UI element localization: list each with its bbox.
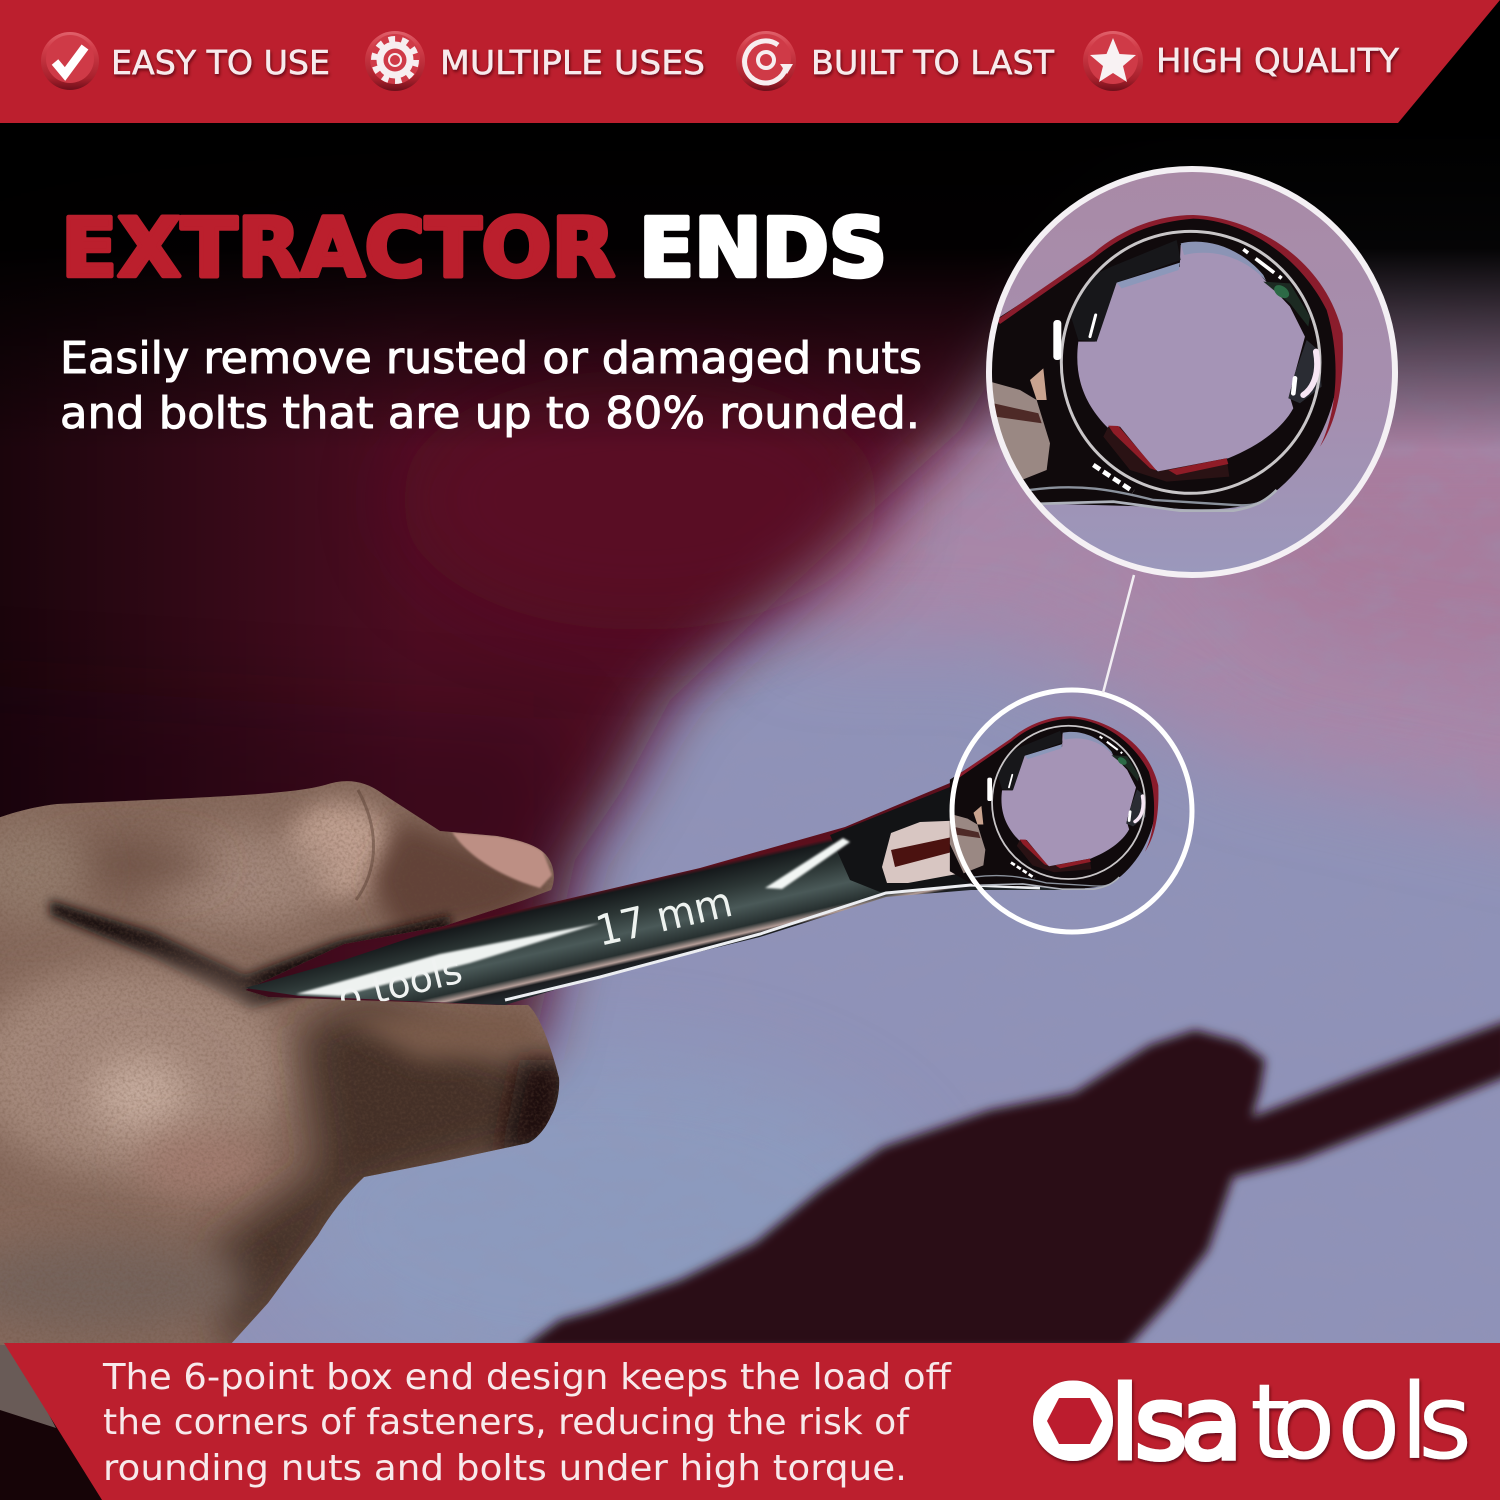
logo: O [1033, 1361, 1113, 1483]
body text: and bolts that are up to 80% rounded. [60, 388, 920, 439]
body text [60, 333, 922, 439]
thumbnail [452, 832, 552, 888]
label: multiple uses: MULTIPLE USES [440, 43, 705, 82]
icon: star [1083, 31, 1143, 91]
magnified wrench body [990, 215, 1343, 511]
wrench neck [830, 725, 1060, 892]
label: built to last: BUILT TO LAST [811, 43, 1055, 82]
top banner [0, 0, 1500, 125]
logo: lsa [1111, 1365, 1242, 1482]
icon: cycle [736, 31, 796, 91]
magnifier ring [989, 169, 1395, 575]
connector line [1103, 575, 1134, 693]
bottom description: the corners of fasteners, reducing the risk of [103, 1402, 910, 1443]
engraving tools: o tools [334, 948, 466, 1021]
wrench shaft [245, 717, 1085, 1005]
bottom banner [4, 1343, 1500, 1500]
logo: tools [1250, 1361, 1472, 1483]
label: easy to use: EASY TO USE [111, 43, 330, 82]
finger reflection on wrench [882, 820, 986, 883]
wrench [245, 716, 1158, 1021]
body text: Easily remove rusted or damaged nuts [60, 333, 922, 384]
bottom description: The 6-point box end design keeps the load off [102, 1357, 952, 1398]
heading: ENDS [639, 202, 887, 296]
shaft glare [296, 923, 600, 996]
bottom description: rounding nuts and bolts under high torque. [103, 1448, 907, 1489]
logo [1033, 1361, 1472, 1483]
icon: gear [365, 31, 425, 91]
heading [61, 202, 887, 296]
hand at lower left [0, 1345, 56, 1428]
magnified wrench circle [989, 169, 1395, 575]
label: high quality: HIGH QUALITY [1156, 41, 1400, 80]
heading: EXTRACTOR [61, 202, 615, 296]
engraving 17mm: 17 mm [591, 877, 737, 956]
hand holding wrench [0, 770, 575, 1360]
small highlight circle [952, 690, 1192, 932]
lower edge chrome line [505, 885, 1040, 1000]
icon: check [41, 32, 99, 90]
wrench box end [950, 716, 1158, 889]
wrench highlight [765, 838, 850, 889]
bottom description [102, 1357, 952, 1489]
cast shadow [519, 1020, 1500, 1350]
